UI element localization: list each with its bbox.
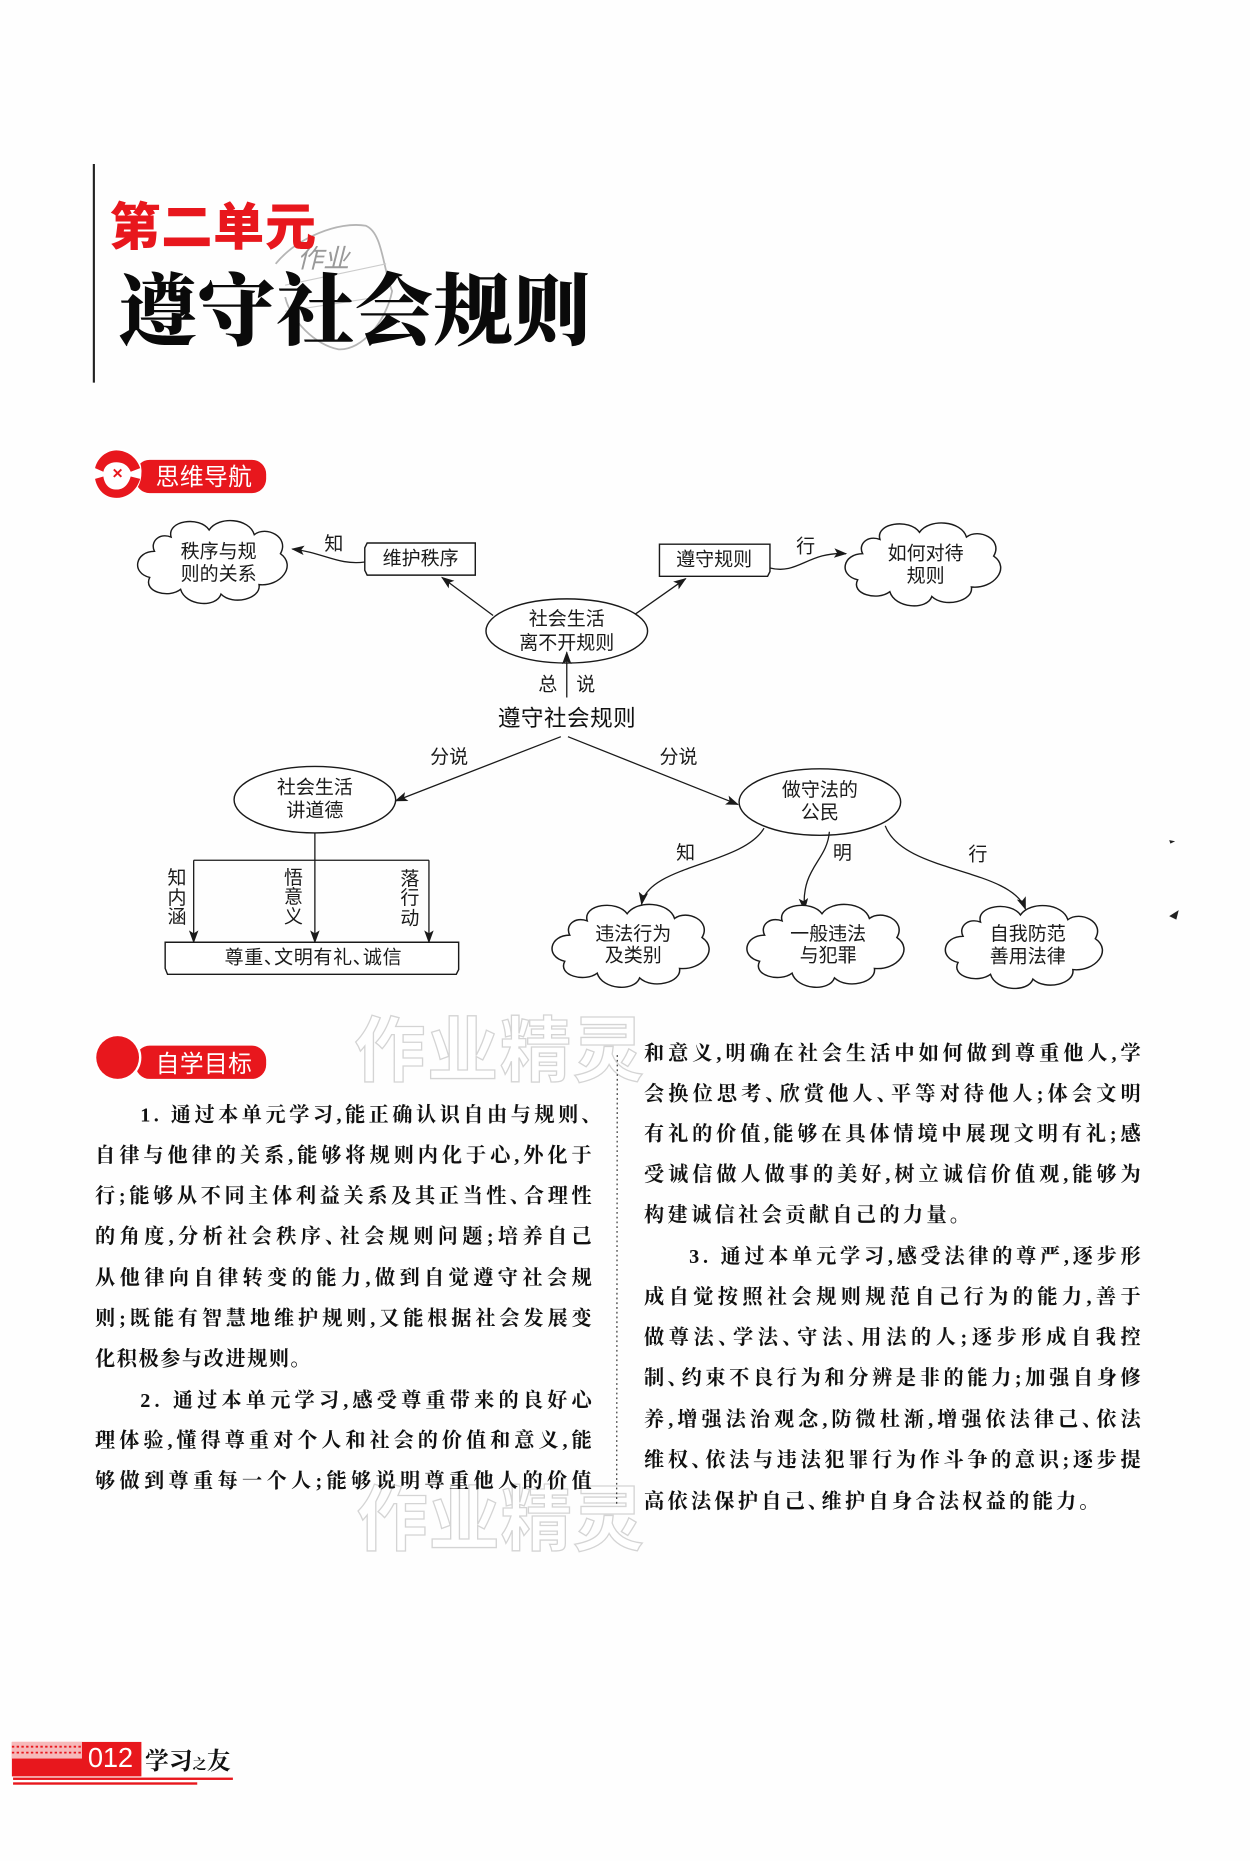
text column: left: 理体验,懂得尊重对个人和社会的价值和意义,能 — [95, 1428, 592, 1452]
vertical labels: 行 — [400, 887, 419, 909]
cloud: offences and crimes — [747, 904, 904, 987]
text column: left: 2. 通过本单元学习,感受尊重带来的良好心 — [140, 1388, 595, 1412]
arrow: general: 说 — [576, 673, 595, 695]
vertical labels: 涵 — [168, 906, 187, 928]
cloud: self protection: 善用法律 — [990, 945, 1066, 967]
text column: left: 行;能够从不同主体利益关系及其正当性、合理性 — [95, 1183, 592, 1207]
text column: left: 自律与他律的关系,能够将规则内化于心,外化于 — [95, 1144, 592, 1167]
arrow: know: 知 — [324, 533, 343, 555]
text column: left: 的角度,分析社会秩序、社会规则问题;培养自己 — [95, 1224, 592, 1248]
cloud: illegal acts — [552, 904, 709, 987]
footer page marker — [12, 1742, 233, 1785]
text column: left: 够做到尊重每一个人;能够说明尊重他人的价值 — [95, 1469, 592, 1493]
text column: right — [644, 1041, 1142, 1513]
ellipse: life needs rules: 社会生活 — [529, 608, 605, 630]
text column: right: 成自觉按照社会规则规范自己行为的能力,善于 — [644, 1284, 1141, 1308]
unit title heading: 遵守社会规则 — [119, 250, 591, 362]
branch arrows: 分说 — [430, 746, 468, 768]
text column: right: 维权、依法与违法犯罪行为作斗争的意识;逐步提 — [644, 1447, 1141, 1471]
branch arrows: 分说 — [659, 746, 697, 768]
stamp watermark: 作业 — [297, 243, 351, 273]
vertical labels: 内 — [168, 887, 187, 909]
ellipse: morality: 讲道德 — [286, 799, 343, 821]
text column: right: 做尊法、学法、守法、用法的人;逐步形成自我控 — [644, 1325, 1141, 1349]
stamp watermark — [276, 225, 392, 349]
section badge: mind map: 思维导航 — [156, 464, 252, 491]
ellipse: life needs rules: 离不开规则 — [519, 632, 614, 654]
text column: right: 受诚信做人做事的美好,树立诚信价值观,能够为 — [644, 1162, 1141, 1186]
unit title block — [94, 164, 591, 383]
text column: right: 养,增强法治观念,防微杜渐,增强依法律己、依法 — [644, 1407, 1142, 1431]
box: maintain order — [365, 543, 475, 575]
arrow: general: 总 — [538, 673, 557, 695]
section badge: self-study goals — [94, 1034, 266, 1081]
arrow: act — [770, 536, 846, 569]
cloud: order and rules: 秩序与规 — [181, 540, 257, 562]
vertical labels: 悟 — [284, 867, 303, 889]
text column: right: 高依法保护自己、维护自身合法权益的能力。 — [644, 1489, 1090, 1513]
box: respect, civility, integrity — [165, 942, 459, 974]
ellipse: lawful citizen — [739, 769, 901, 835]
text column: right: 会换位思考、欣赏他人、平等对待他人;体会文明 — [644, 1081, 1141, 1105]
scan specks — [1169, 840, 1179, 920]
text column: left: 则;既能有智慧地维护规则,又能根据社会发展变 — [95, 1306, 593, 1330]
text column: right: 3. 通过本单元学习,感受法律的尊严,逐步形 — [689, 1244, 1141, 1268]
vertical labels: 意 — [284, 886, 303, 908]
box: obey rules — [659, 544, 770, 576]
curved arrows to clouds: 行 — [968, 843, 987, 865]
box: respect, civility, integrity: 尊重、文明有礼、诚信 — [225, 947, 402, 969]
cloud: order and rules — [138, 521, 287, 603]
arrows to top boxes — [442, 577, 686, 616]
box: maintain order: 维护秩序 — [383, 547, 459, 569]
cloud: order and rules: 则的关系 — [181, 563, 257, 585]
vertical labels: 义 — [284, 906, 303, 928]
cloud: self protection — [945, 906, 1102, 988]
bracket arrows — [194, 833, 429, 942]
box: obey rules: 遵守规则 — [676, 549, 752, 571]
text column: left: 1. 通过本单元学习,能正确认识自由与规则、 — [140, 1104, 592, 1127]
cloud: self protection: 自我防范 — [990, 923, 1066, 945]
curved arrows to clouds: 知 — [676, 842, 695, 864]
branch arrows — [396, 737, 738, 804]
cloud: illegal acts: 及类别 — [605, 944, 662, 966]
section badge: self-study goals: 自学目标 — [156, 1051, 252, 1078]
cloud: offences and crimes: 与犯罪 — [800, 944, 857, 966]
cloud: how to treat rules: 如何对待 — [888, 543, 964, 565]
text column: left — [95, 1104, 595, 1493]
arrow: act: 行 — [796, 536, 815, 558]
curved arrows to clouds — [642, 826, 1025, 910]
section badge: mind map — [94, 450, 266, 498]
cloud: offences and crimes: 一般违法 — [790, 923, 866, 945]
vertical labels: 落 — [400, 868, 419, 890]
arrow: general — [538, 652, 595, 697]
text column: right: 制、约束不良行为和分辨是非的能力;加强自身修 — [644, 1365, 1141, 1389]
vertical labels — [168, 867, 419, 929]
ellipse: morality: 社会生活 — [277, 777, 353, 799]
ellipse: life needs rules — [486, 599, 648, 663]
footer page marker: 012 — [88, 1742, 133, 1773]
central topic: 遵守社会规则 — [498, 706, 636, 731]
text column: left: 化积极参与改进规则。 — [95, 1347, 301, 1370]
unit number heading: 第二单元 — [109, 186, 316, 260]
watermark top: 作业精灵 — [354, 992, 644, 1096]
text column: right: 构建诚信社会贡献自己的力量。 — [644, 1203, 960, 1226]
text column: right: 和意义,明确在社会生活中如何做到尊重他人,学 — [644, 1041, 1141, 1065]
column divider — [616, 1055, 618, 1507]
text column: left: 从他律向自律转变的能力,做到自觉遵守社会规 — [95, 1265, 592, 1289]
text column: right: 有礼的价值,能够在具体情境中展现文明有礼;感 — [644, 1122, 1142, 1146]
cloud: how to treat rules — [845, 523, 1001, 606]
section badge: mind map: × — [112, 463, 123, 483]
footer page marker: 学习之友 — [145, 1742, 231, 1776]
cloud: illegal acts: 违法行为 — [595, 923, 671, 945]
curved arrows to clouds: 明 — [833, 843, 852, 864]
arrow: know — [292, 533, 365, 563]
watermark bottom: 作业精灵 — [356, 1462, 644, 1566]
vertical labels: 动 — [400, 907, 419, 929]
ellipse: lawful citizen: 做守法的 — [782, 779, 858, 801]
ellipse: morality — [234, 766, 396, 833]
mind map diagram — [138, 521, 1179, 988]
cloud: how to treat rules: 规则 — [907, 565, 945, 587]
vertical labels: 知 — [168, 867, 187, 889]
ellipse: lawful citizen: 公民 — [801, 803, 839, 824]
